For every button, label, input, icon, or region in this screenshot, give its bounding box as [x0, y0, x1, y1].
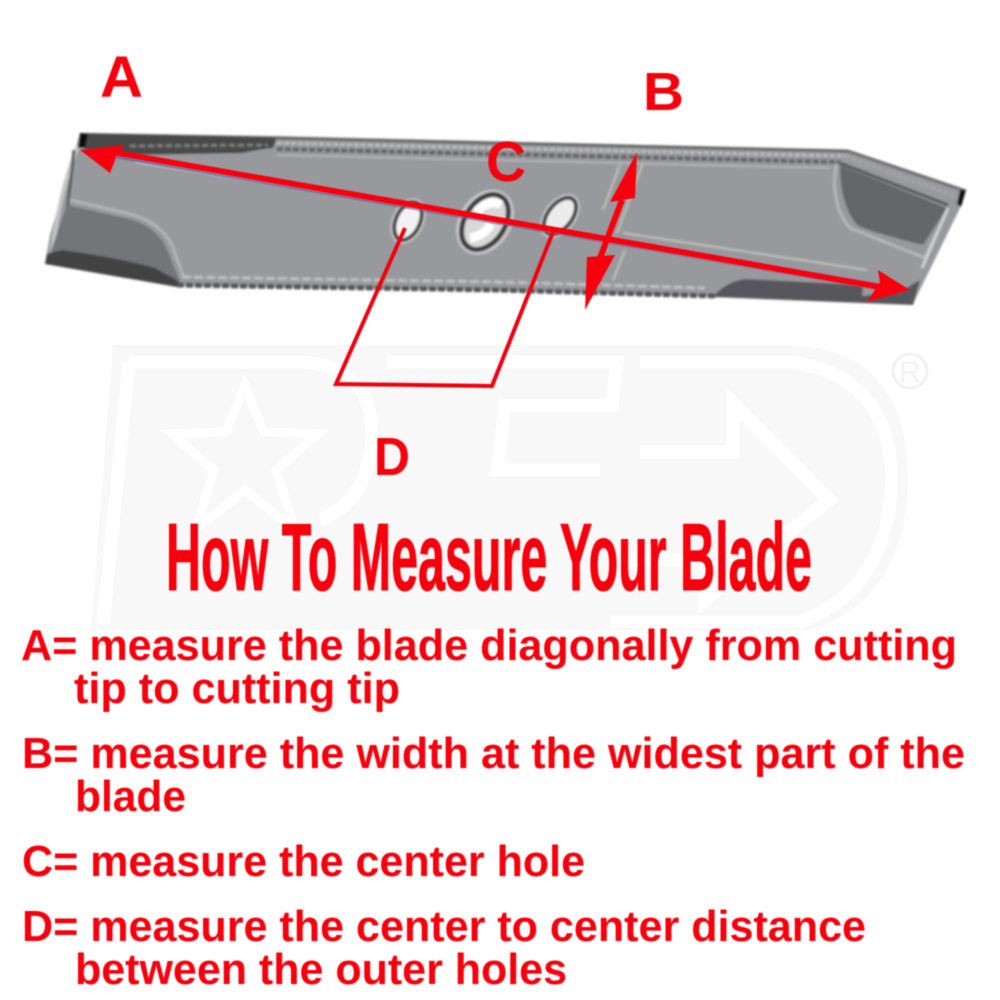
- instructions: [21, 621, 965, 994]
- instruction D: between the outer holes: [75, 945, 567, 994]
- dark top-left cutting edge: [80, 133, 277, 155]
- instruction B: [22, 729, 965, 821]
- red measurement marks: [80, 145, 910, 386]
- bottom-right dark edge: [713, 279, 920, 305]
- hole: center: [444, 178, 526, 266]
- instruction B: B= measure the width at the widest part of the: [22, 729, 965, 778]
- bottom rim: [177, 285, 717, 296]
- bracket D: center to center: [336, 228, 553, 386]
- light left edge: [52, 146, 78, 252]
- hole: right: [532, 186, 588, 246]
- registered mark: [893, 354, 927, 389]
- watermark logo: [91, 345, 927, 630]
- instruction D: D= measure the center to center distance: [22, 902, 866, 951]
- blade body: [45, 133, 966, 304]
- left lift pocket: [47, 205, 180, 281]
- left lower dark edge: [45, 250, 180, 287]
- instruction B: blade: [75, 772, 186, 821]
- label D: D: [374, 427, 410, 487]
- hole: left: [383, 192, 433, 250]
- blade top rim: [277, 138, 848, 168]
- arrow B: blade width: [585, 152, 637, 310]
- blade illustration: [45, 133, 966, 305]
- instruction A: tip to cutting tip: [74, 664, 400, 713]
- light right edge: [835, 165, 938, 258]
- label C: C: [486, 130, 526, 194]
- label B: B: [643, 62, 684, 122]
- arrow A: tip to tip diagonal: [80, 145, 910, 302]
- instruction D: [22, 902, 866, 994]
- instruction A: [21, 621, 957, 713]
- right lift pocket: [840, 165, 947, 245]
- label A: A: [100, 45, 143, 110]
- black tip accents: [78, 133, 966, 207]
- blade right rim: [840, 151, 966, 205]
- registered mark: R: [899, 356, 921, 389]
- left pocket light trim: [70, 200, 184, 278]
- faint highlight lines around measurement marks: [135, 162, 867, 280]
- instruction C: C= measure the center hole: [22, 837, 585, 886]
- instruction A: A= measure the blade diagonally from cutting: [21, 621, 957, 670]
